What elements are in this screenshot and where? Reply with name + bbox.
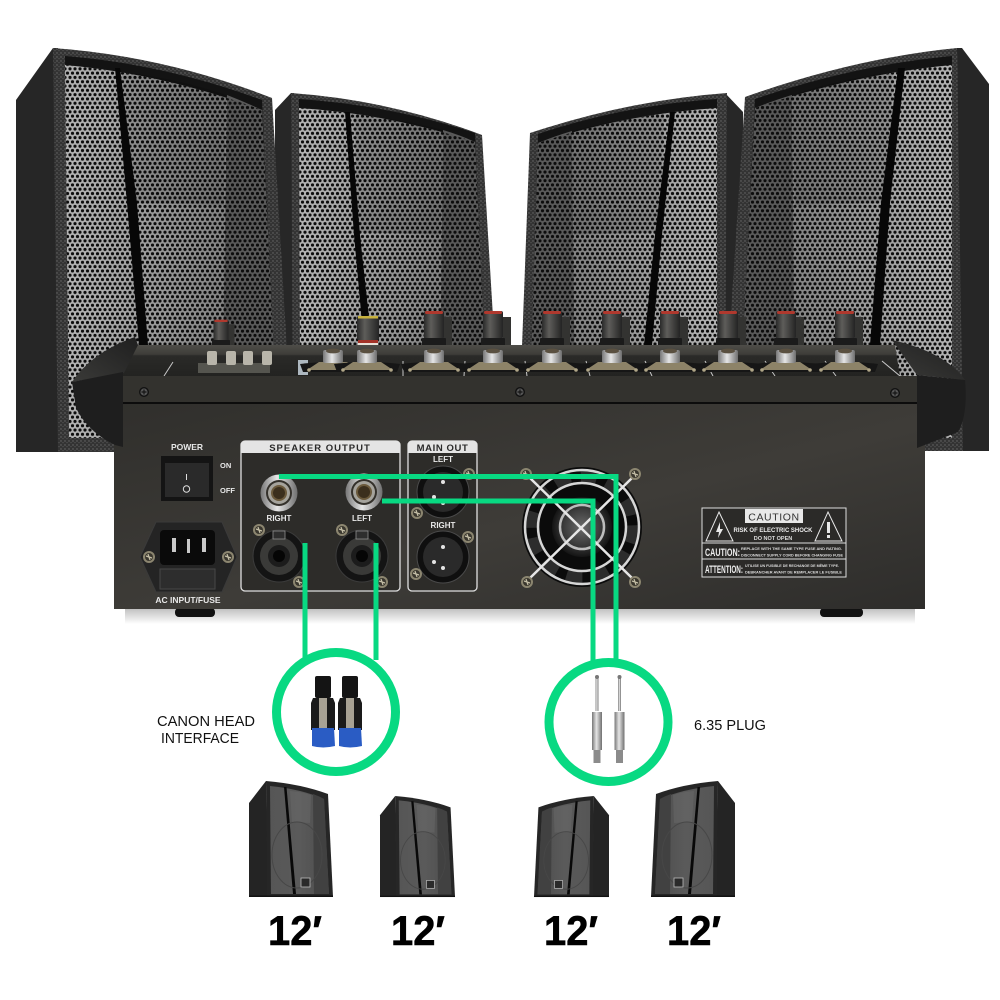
panel: speaker output: LEFT: [352, 514, 372, 523]
mixer: left handle: [72, 337, 138, 447]
mixer: floor shadow: [125, 608, 915, 624]
mini speaker 4: [651, 781, 735, 897]
AC power inlet: [140, 522, 237, 605]
connector: 6.35 plugs: [592, 675, 624, 763]
panel: speaker output: RIGHT: [267, 514, 292, 523]
mixer: top control panel: [122, 345, 900, 376]
caution label: ATTENTION:: [705, 564, 743, 576]
cooling fan: [520, 467, 642, 588]
power switch: ON: [220, 461, 231, 470]
caution label: DEBRANCHER AVANT DE REMPLACER LE FUSIBLE: [745, 570, 842, 574]
mixer: four push buttons: [198, 351, 272, 373]
green wiring lines: [279, 476, 616, 662]
speakon socket: right: [253, 530, 305, 582]
speaker: inner left large: [275, 93, 498, 400]
speaker: far left large: [16, 48, 293, 452]
xlr socket: left: [417, 466, 469, 518]
green circle: canon head: [276, 652, 396, 772]
mixer: right handle: [892, 340, 966, 448]
connector: canon heads: [311, 676, 362, 748]
speakon socket: left: [336, 530, 388, 582]
label: 6.35 plug: 6.35 PLUG: [694, 717, 766, 734]
panel: main out: [408, 441, 477, 591]
mini speaker 1: [249, 781, 333, 897]
mini speaker 3: [534, 796, 609, 897]
mixer: front strip with screws: [122, 376, 917, 404]
panel: speaker output: [241, 441, 400, 591]
mixer: rubber feet: [175, 608, 863, 617]
panel: main out: RIGHT: [431, 521, 456, 530]
mixer: control knobs: [212, 311, 863, 346]
caution label: [702, 508, 846, 577]
caution label: CAUTION:: [705, 547, 740, 559]
mini speaker 2: [380, 796, 455, 897]
label: canon head interface: INTERFACE: [161, 730, 239, 747]
label: canon head interface: CANON HEAD: [157, 713, 255, 730]
power switch: [161, 442, 235, 501]
size label 3: 12′: [544, 907, 598, 954]
caution label: UTILISE UN FUSIBLE DE RECHANGE DE MÊME TYPE.: [745, 563, 839, 568]
jack: right: [260, 474, 298, 512]
caution label: CAUTION: [748, 512, 800, 524]
speaker: inner right large: [520, 93, 743, 400]
heading: main out: MAIN OUT: [417, 443, 468, 454]
caution label: DO NOT OPEN: [754, 536, 792, 542]
power switch: OFF: [220, 486, 235, 495]
caution label: DISCONNECT SUPPLY CORD BEFORE CHANGING FUSE: [741, 554, 843, 558]
size label 1: 12′: [268, 907, 322, 954]
heading: speaker output: SPEAKER OUTPUT: [269, 443, 371, 454]
size label 4: 12′: [667, 907, 721, 954]
panel: main out: LEFT: [433, 455, 453, 464]
green circle: 6.35 plug: [549, 662, 668, 782]
label: ac input: AC INPUT/FUSE: [155, 595, 221, 605]
caution label: RISK OF ELECTRIC SHOCK: [734, 527, 813, 534]
caution label: REPLACE WITH THE SAME TYPE FUSE AND RATING.: [741, 547, 842, 551]
mixer: channel sockets: [298, 349, 878, 375]
jack: left: [346, 474, 382, 510]
speaker: far right large: [722, 48, 989, 451]
size label 2: 12′: [391, 907, 445, 954]
xlr socket: right: [417, 531, 469, 583]
label: power: POWER: [171, 442, 203, 452]
mixer: rear panel body: [114, 402, 925, 609]
